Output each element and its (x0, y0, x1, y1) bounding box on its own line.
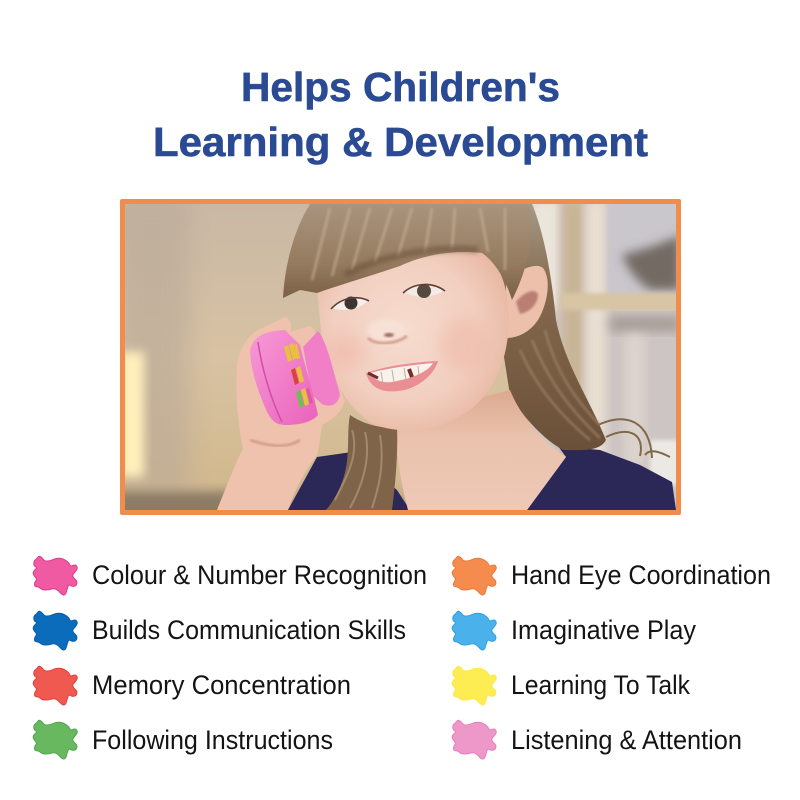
hair lower-left locks (326, 415, 397, 510)
hair bangs (283, 204, 531, 300)
mouth (366, 361, 438, 391)
item: Colour & Number Recognition (33, 556, 427, 595)
right-side curls (598, 419, 670, 458)
eyes (331, 284, 445, 310)
legend (33, 556, 771, 759)
item: Learning To Talk (452, 666, 690, 705)
title (153, 64, 648, 165)
item: Colour & Number Recognition: Colour & Number Recognition (92, 560, 427, 590)
item: Hand Eye Coordination: Hand Eye Coordination (511, 560, 771, 590)
blurred room background (115, 195, 680, 522)
title: Learning & Development (153, 119, 648, 165)
neck (395, 390, 566, 510)
item: Following Instructions (33, 720, 333, 759)
item: Imaginative Play (452, 611, 696, 650)
photo panel: girl holding pink toy phone (115, 195, 681, 522)
ear (506, 266, 548, 338)
item: Memory Concentration: Memory Concentration (92, 670, 351, 700)
item: Listening & Attention (452, 720, 742, 759)
item: Memory Concentration (33, 666, 351, 705)
item: Listening & Attention: Listening & Attention (511, 725, 742, 755)
nose (367, 319, 407, 343)
item: Builds Communication Skills: Builds Communication Skills (92, 615, 406, 645)
title: Helps Children's (241, 64, 560, 110)
item: Hand Eye Coordination (452, 556, 771, 595)
hair back right (490, 204, 606, 450)
toy phone (250, 330, 340, 425)
face (317, 246, 509, 430)
shirt (288, 446, 676, 510)
item: Imaginative Play: Imaginative Play (511, 615, 696, 645)
arm and hand (217, 317, 345, 510)
item: Following Instructions: Following Instructions (92, 725, 333, 755)
item: Learning To Talk: Learning To Talk (511, 670, 690, 700)
item: Builds Communication Skills (33, 611, 406, 650)
